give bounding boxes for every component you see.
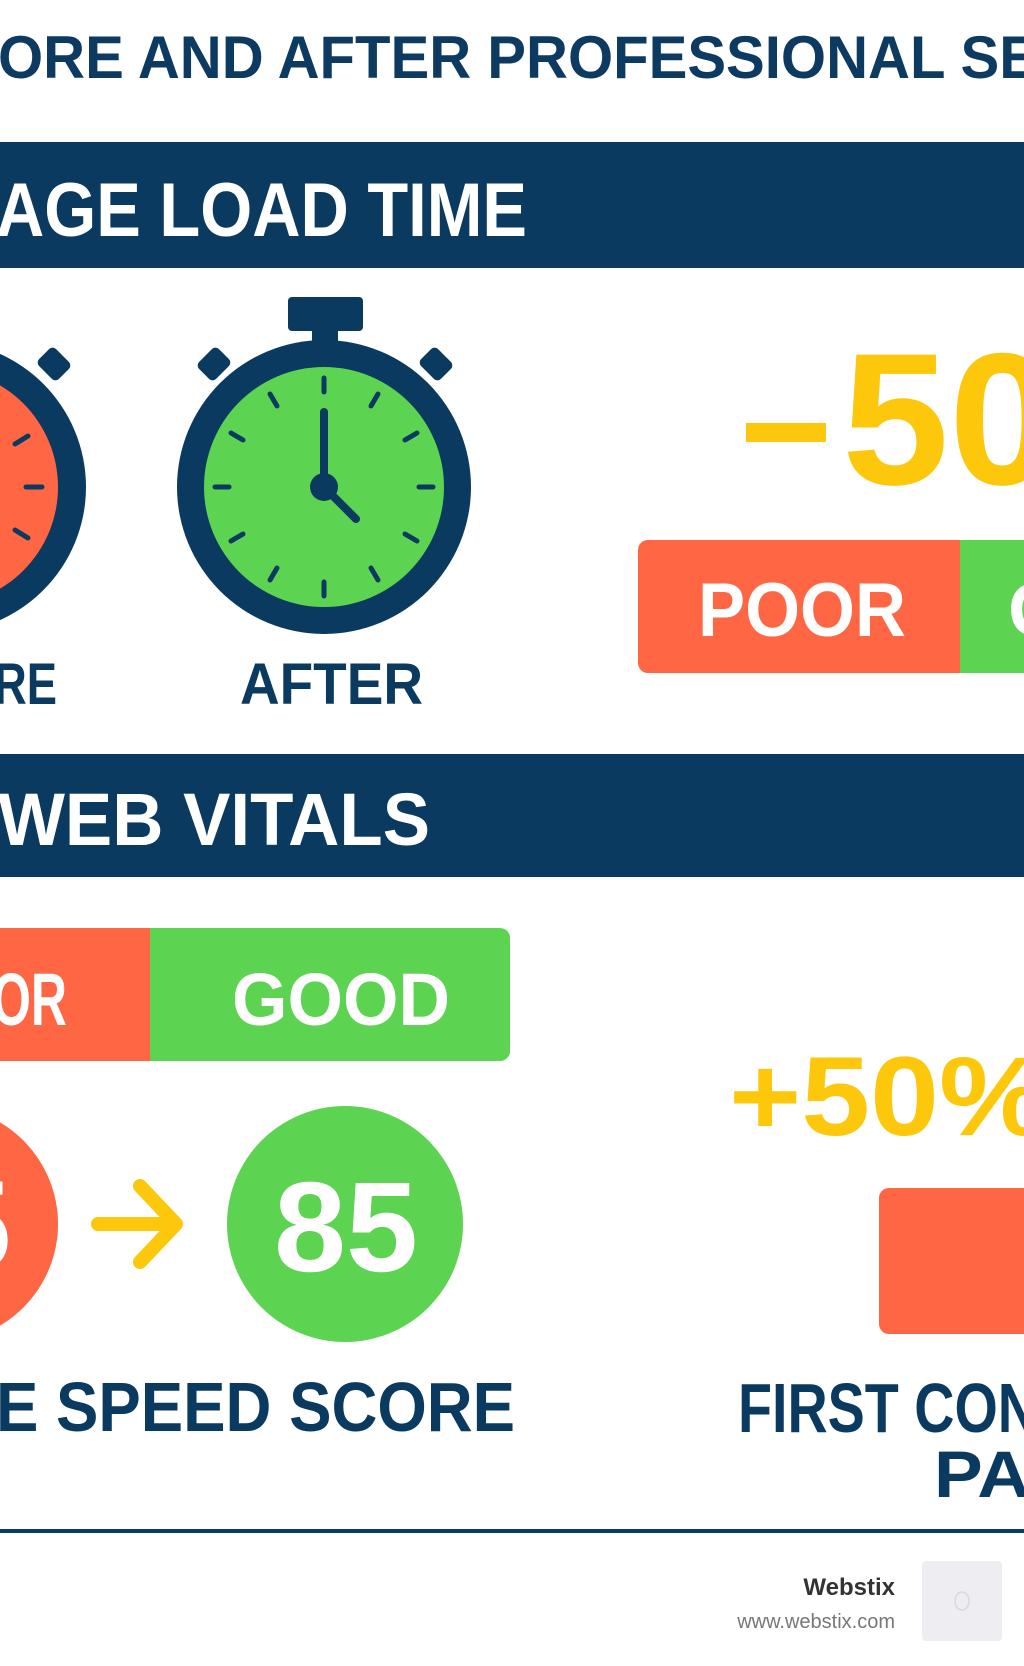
bar: FCP — [879, 1188, 1024, 1334]
score: after (green circle 85): 85 — [274, 1156, 418, 1299]
header band: page load time — [0, 142, 1024, 268]
label: first contentful paint: PA — [934, 1437, 1024, 1511]
bar: poor/good load time: POOR — [698, 568, 906, 653]
stat: +50%: +50% — [729, 1034, 1024, 1159]
score: after (green circle 85) — [227, 1106, 463, 1342]
footer: brand: Webstix — [803, 1574, 896, 1601]
footer: brand: www.webstix.com — [736, 1611, 895, 1633]
icon: after stopwatch (green) — [177, 297, 471, 634]
arrow — [98, 1186, 176, 1262]
score: before (red circle) — [0, 1106, 58, 1342]
label: after: AFTER — [240, 652, 423, 717]
icon: before stopwatch (red) — [0, 341, 86, 633]
bar: poor/good load time — [638, 540, 1024, 673]
label: page speed score: E SPEED SCORE — [0, 1368, 515, 1446]
label: first contentful paint — [738, 1369, 1024, 1511]
footer: brand — [736, 1574, 896, 1633]
stat: -50 — [746, 314, 1024, 524]
header band: core web vitals — [0, 754, 1024, 877]
header band: core web vitals: WEB VITALS — [0, 778, 430, 861]
header band: page load time: AGE LOAD TIME — [0, 168, 527, 253]
bar: poor/good vitals: GOOD — [232, 958, 450, 1041]
footer: logo placeholder — [922, 1561, 1002, 1641]
bar: poor/good vitals — [0, 928, 510, 1061]
